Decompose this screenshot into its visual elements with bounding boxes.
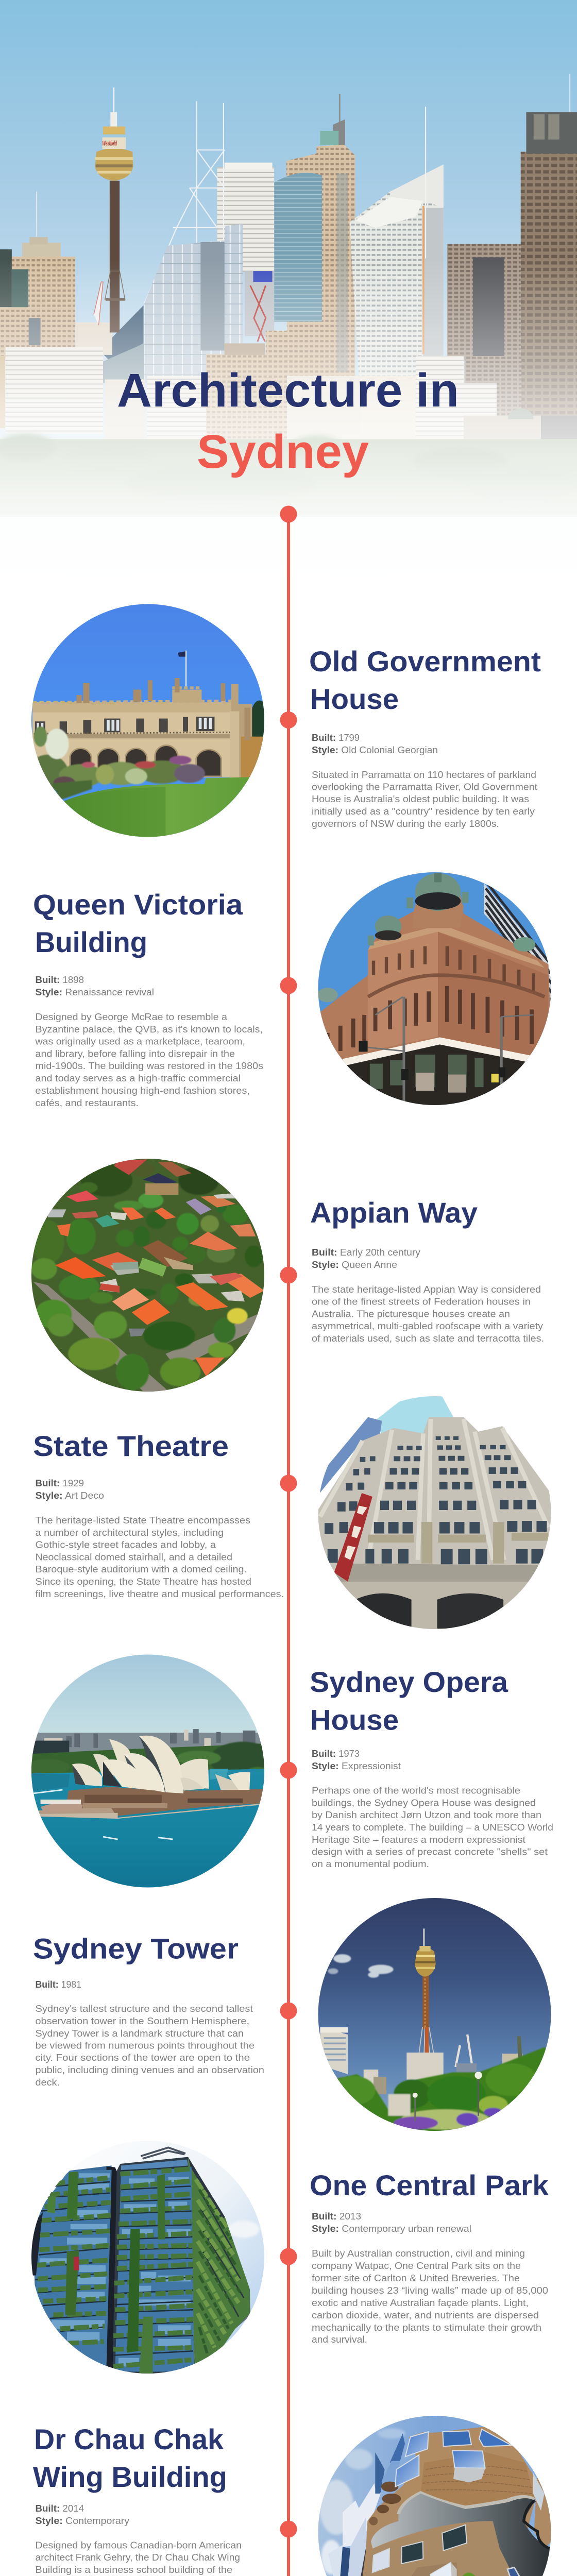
description: Sydney's tallest structure and the second tallest <box>35 2003 253 2014</box>
heading: Sydney Tower <box>33 1933 239 1965</box>
description: mechanically to the plants to stimulate their growth <box>312 2322 541 2333</box>
description: design with a series of precast concrete "shells" set <box>312 1846 548 1857</box>
photo: Sydney Tower <box>316 1895 556 2134</box>
built and style: Built: 1898 <box>35 974 84 985</box>
description <box>35 2540 261 2576</box>
photo: Dr Chau Chak Wing Building <box>314 2411 558 2576</box>
description: former site of Carlton & United Breweries. The <box>312 2273 520 2283</box>
description: film screenings, live theatre and musical performances. <box>35 1588 284 1599</box>
photo: Old Government House <box>31 604 264 837</box>
description: Designed by famous Canadian-born American <box>35 2540 242 2550</box>
description: carbon dioxide, water, and nutrients are dispersed <box>312 2310 539 2320</box>
built and style: Style: Contemporary urban renewal <box>312 2223 471 2234</box>
timeline line, upper part <box>287 514 290 1649</box>
description: Situated in Parramatta on 110 hectares of parkland <box>312 769 536 780</box>
timeline dot <box>280 1475 297 1492</box>
timeline dot <box>280 977 297 994</box>
panel: Appian Way <box>22 1151 544 1397</box>
built and style: Built: 2014 <box>35 2503 84 2514</box>
description: be viewed from numerous points throughout the <box>35 2040 254 2051</box>
heading <box>310 1666 508 1736</box>
panel: Old Government House <box>22 599 541 845</box>
description: cafés, and restaurants. <box>35 1097 139 1108</box>
header skyline photo <box>0 0 577 587</box>
description <box>312 1284 544 1344</box>
heading: Sydney Opera <box>310 1666 508 1698</box>
description: establishment housing high-end fashion stores, <box>35 1085 250 1096</box>
built and style: Style: Old Colonial Georgian <box>312 744 438 755</box>
timeline line, lower part <box>287 1649 290 2576</box>
heading: Wing Building <box>33 2461 227 2493</box>
header skyline photo: Westfield <box>103 139 117 147</box>
timeline dot <box>280 2520 297 2538</box>
photo: Queen Victoria Building <box>316 867 556 1109</box>
description: on a monumental podium. <box>312 1858 429 1869</box>
description: a number of architectural styles, including <box>35 1527 224 1538</box>
description: Built by Australian construction, civil and mining <box>312 2248 525 2259</box>
heading: House <box>310 683 399 715</box>
description <box>312 1785 553 1869</box>
description: exotic and native Australian façade plants. Light, <box>312 2297 529 2308</box>
heading: Appian Way <box>310 1196 478 1229</box>
built and style: Built: Early 20th century <box>312 1247 421 1258</box>
heading <box>33 2423 227 2493</box>
description: Gothic-style street facades and lobby, a <box>35 1539 216 1550</box>
title <box>117 364 459 478</box>
description: Baroque-style auditorium with a domed ceiling. <box>35 1564 247 1574</box>
title: Architecture in <box>117 364 459 417</box>
built and style: Built: 1973 <box>312 1748 360 1759</box>
description: buildings, the Sydney Opera House was designed <box>312 1797 536 1808</box>
description: Designed by George McRae to resemble a <box>35 1011 228 1022</box>
description: was originally used as a marketplace, tearoom, <box>35 1036 245 1047</box>
built and style: Built: 1799 <box>312 732 360 743</box>
description: of materials used, such as slate and terracotta tiles. <box>312 1333 544 1344</box>
description: and today serves as a high-traffic commercial <box>35 1073 241 1083</box>
timeline dot <box>280 1762 297 1778</box>
built and style: Style: Contemporary <box>35 2515 130 2526</box>
description <box>312 2248 548 2345</box>
panel: One Central Park <box>29 2138 549 2379</box>
description: mid-1900s. The building was restored in the 1980s <box>35 1060 263 1071</box>
description: company Watpac, One Central Park sits on the <box>312 2260 521 2271</box>
built and style <box>35 2503 130 2526</box>
built and style <box>312 732 438 755</box>
description: Since its opening, the State Theatre has hosted <box>35 1576 251 1587</box>
description: building houses 23 “living walls” made up of 85,000 <box>312 2285 548 2296</box>
built and style: Style: Queen Anne <box>312 1259 397 1270</box>
description: Australia. The picturesque houses create an <box>312 1308 510 1319</box>
description: Sydney Tower is a landmark structure that can <box>35 2028 244 2039</box>
description: asymmetrical, multi-gabled roofscape with a variety <box>312 1320 544 1331</box>
photo: One Central Park <box>29 2138 269 2379</box>
heading: Building <box>35 926 147 958</box>
description: by Danish architect Jørn Utzon and took more than <box>312 1809 541 1820</box>
title: Sydney <box>197 426 369 478</box>
description <box>35 2003 264 2088</box>
description: governors of NSW during the early 1800s. <box>312 818 499 829</box>
heading: House <box>310 1703 399 1736</box>
panel: Dr Chau Chak Wing Building <box>33 2411 558 2576</box>
photo: State Theatre <box>316 1394 556 1636</box>
description: 14 years to complete. The building – a UNESCO World <box>312 1822 553 1833</box>
timeline start dot <box>280 506 297 522</box>
timeline dot <box>280 2002 297 2020</box>
built year: Built: 1981 <box>35 1979 81 1990</box>
description: deck. <box>35 2077 60 2088</box>
description: and library, before falling into disrepair in the <box>35 1048 235 1059</box>
description: and survival. <box>312 2334 367 2345</box>
description <box>312 769 538 829</box>
heading <box>309 645 541 715</box>
timeline dot <box>280 2248 297 2265</box>
description: overlooking the Parramatta River, Old Government <box>312 781 538 792</box>
built and style <box>312 1247 421 1270</box>
description: observation tower in the Southern Hemisphere, <box>35 2015 249 2026</box>
description: The heritage-listed State Theatre encompasses <box>35 1515 250 1526</box>
description: initially used as a "country" residence by ten early <box>312 806 535 817</box>
heading: State Theatre <box>33 1430 229 1462</box>
heading <box>33 888 243 958</box>
panel: Sydney Opera House <box>31 1655 553 1888</box>
heading: One Central Park <box>310 2169 549 2201</box>
built and style <box>312 1748 401 1771</box>
photo: Appian Way <box>31 1159 264 1392</box>
description: Neoclassical domed stairhall, and a detailed <box>35 1551 232 1562</box>
description: Heritage Site – features a modern expressionist <box>312 1834 526 1845</box>
heading: Old Government <box>309 645 541 677</box>
panel: Sydney Tower <box>33 1895 556 2134</box>
description <box>35 1011 263 1108</box>
description: public, including dining venues and an observation <box>35 2064 264 2075</box>
panel: Queen Victoria Building <box>33 867 556 1109</box>
photo: Sydney Opera House <box>31 1655 264 1888</box>
description: Byzantine palace, the QVB, as it's known to locals, <box>35 1024 263 1035</box>
built and style <box>35 974 154 997</box>
built and style: Style: Art Deco <box>35 1490 104 1501</box>
heading: Queen Victoria <box>33 888 243 921</box>
built and style <box>312 2211 471 2234</box>
timeline dot <box>280 711 297 728</box>
built and style <box>35 1478 104 1501</box>
description: Building is a business school building of the <box>35 2564 232 2575</box>
built and style: Built: 2013 <box>312 2211 361 2222</box>
heading: Dr Chau Chak <box>34 2423 224 2455</box>
panel: State Theatre <box>33 1394 556 1636</box>
description: one of the finest streets of Federation houses in <box>312 1296 531 1307</box>
description: The state heritage-listed Appian Way is considered <box>312 1284 541 1295</box>
description: House is Australia's oldest public building. It was <box>312 793 529 804</box>
built and style: Style: Renaissance revival <box>35 987 154 997</box>
built and style: Style: Expressionist <box>312 1760 401 1771</box>
description: Perhaps one of the world's most recognisable <box>312 1785 520 1796</box>
timeline dot <box>280 1266 297 1284</box>
description: city. Four sections of the tower are open to the <box>35 2052 250 2063</box>
description <box>35 1515 284 1599</box>
description: architect Frank Gehry, the Dr Chau Chak Wing <box>35 2552 240 2563</box>
built and style: Built: 1929 <box>35 1478 84 1488</box>
